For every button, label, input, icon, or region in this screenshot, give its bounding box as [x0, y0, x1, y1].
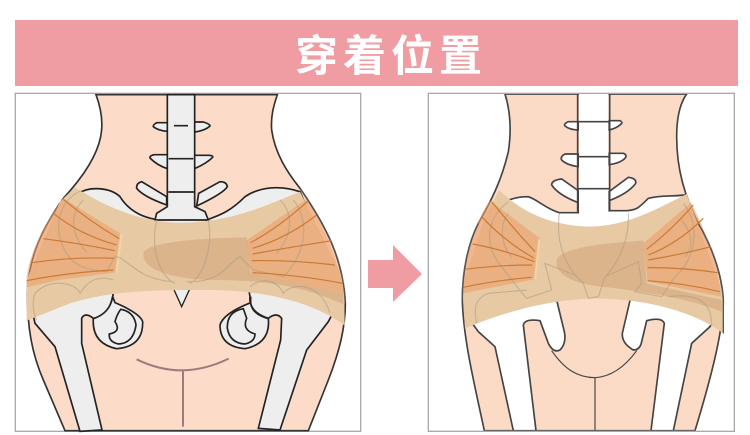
- right panel frame: [428, 93, 734, 431]
- right orange right area: [643, 203, 721, 297]
- arrow: [368, 245, 422, 302]
- left body silhouette: [27, 95, 345, 431]
- underwear line: [137, 359, 229, 427]
- right ghost outlines: [475, 202, 712, 325]
- light strip at belt edge: [117, 233, 122, 273]
- panel: left pelvis diagram: [15, 93, 361, 431]
- right pelvis bones: [465, 195, 722, 431]
- right support belt band: [462, 190, 723, 333]
- right orange muscle area: [246, 199, 344, 293]
- belt darker centre area: [143, 237, 343, 304]
- bone ghost outlines: [33, 190, 330, 320]
- left pelvis bones: [28, 188, 343, 431]
- spine and vertebrae: [28, 95, 343, 431]
- body outline over belt: [300, 188, 345, 303]
- right muscle fibres: [463, 202, 720, 292]
- right body outline over belt: [462, 223, 723, 333]
- right spine and vertebrae: [465, 93, 722, 431]
- right body silhouette: [462, 94, 723, 431]
- title banner: [15, 20, 738, 86]
- right orange left area: [462, 201, 540, 293]
- right belt darker centre area: [557, 241, 722, 312]
- right light strip at belt edge: [535, 239, 539, 279]
- support belt band: [27, 187, 345, 325]
- panel: right pelvis diagram: [428, 93, 734, 431]
- pelvic arch: [552, 351, 637, 431]
- left orange muscle area: [27, 198, 120, 287]
- title banner: 穿着位置: [295, 22, 487, 84]
- muscle fibres: [27, 199, 343, 283]
